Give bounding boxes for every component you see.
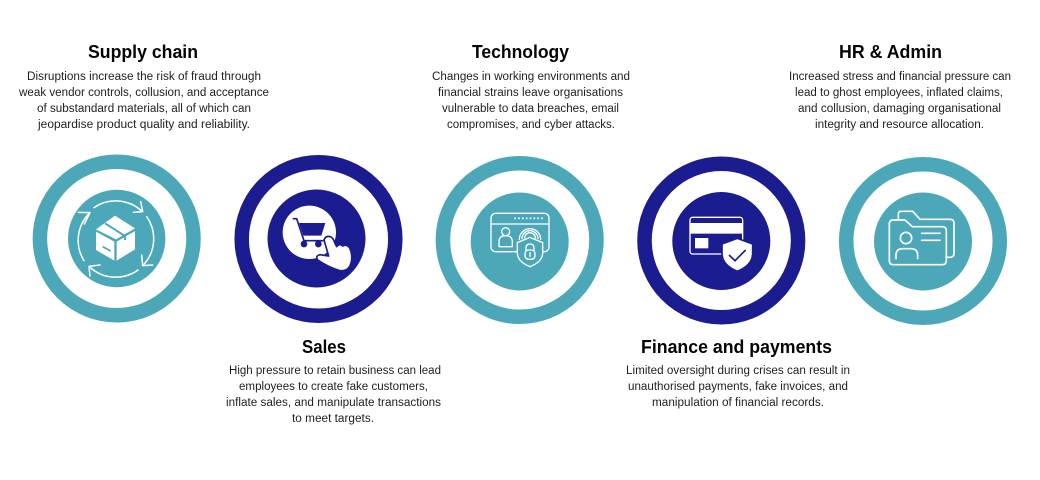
heading: finance and payments: Finance and payments (641, 337, 832, 357)
text block: supply chain: Disruptions increase the risk of fraud through (27, 71, 261, 83)
text block: supply chain: weak vendor controls, collusion, and acceptance (18, 87, 269, 99)
text block: sales: to meet targets. (292, 413, 374, 425)
text block: technology (432, 71, 630, 131)
text block: hr and admin: and collusion, damaging organisational (798, 103, 1001, 115)
text block: sales: High pressure to retain business can lead (229, 365, 441, 377)
icon: payment card with shield (644, 164, 798, 317)
panel: technology (432, 42, 630, 317)
heading: sales: Sales (302, 337, 346, 357)
heading: supply chain: Supply chain (88, 42, 198, 62)
text block: technology: compromises, and cyber attacks. (447, 119, 615, 131)
panel: hr and admin (789, 42, 1011, 318)
text block: technology: vulnerable to data breaches, email (442, 103, 619, 115)
text block: hr and admin: Increased stress and financial pressure can (789, 71, 1011, 83)
text block: finance and payments: unauthorised payments, fake invoices, and (628, 381, 848, 393)
text block: sales (226, 365, 441, 425)
text block: hr and admin: lead to ghost employees, inflated claims, (795, 87, 1003, 99)
panel: finance and payments (626, 164, 850, 409)
text block: finance and payments: manipulation of financial records. (652, 397, 824, 409)
text block: supply chain: jeopardise product quality and reliability. (37, 119, 250, 131)
text block: hr and admin (789, 71, 1011, 131)
panel: sales (226, 162, 441, 425)
text block: supply chain (18, 71, 269, 131)
text block: sales: employees to create fake customers, (239, 381, 428, 393)
text block: finance and payments: Limited oversight during crises can result in (626, 365, 850, 377)
text block: finance and payments (626, 365, 850, 409)
icon: personnel folder (846, 164, 1000, 318)
heading: technology: Technology (472, 42, 569, 62)
heading: hr and admin: HR & Admin (839, 42, 942, 62)
icon: shopping cart with pointing hand (242, 162, 395, 316)
text block: hr and admin: integrity and resource allocation. (815, 119, 984, 131)
text block: technology: Changes in working environments and (432, 71, 630, 83)
text block: sales: inflate sales, and manipulate transactions (226, 397, 441, 409)
panel: supply chain (18, 42, 269, 315)
icon: box with cycle arrows (40, 162, 194, 315)
text block: supply chain: of substandard materials, all of which can (37, 103, 251, 115)
text block: technology: financial strains leave organisations (438, 87, 623, 99)
icon: id card with shield lock (443, 163, 596, 317)
